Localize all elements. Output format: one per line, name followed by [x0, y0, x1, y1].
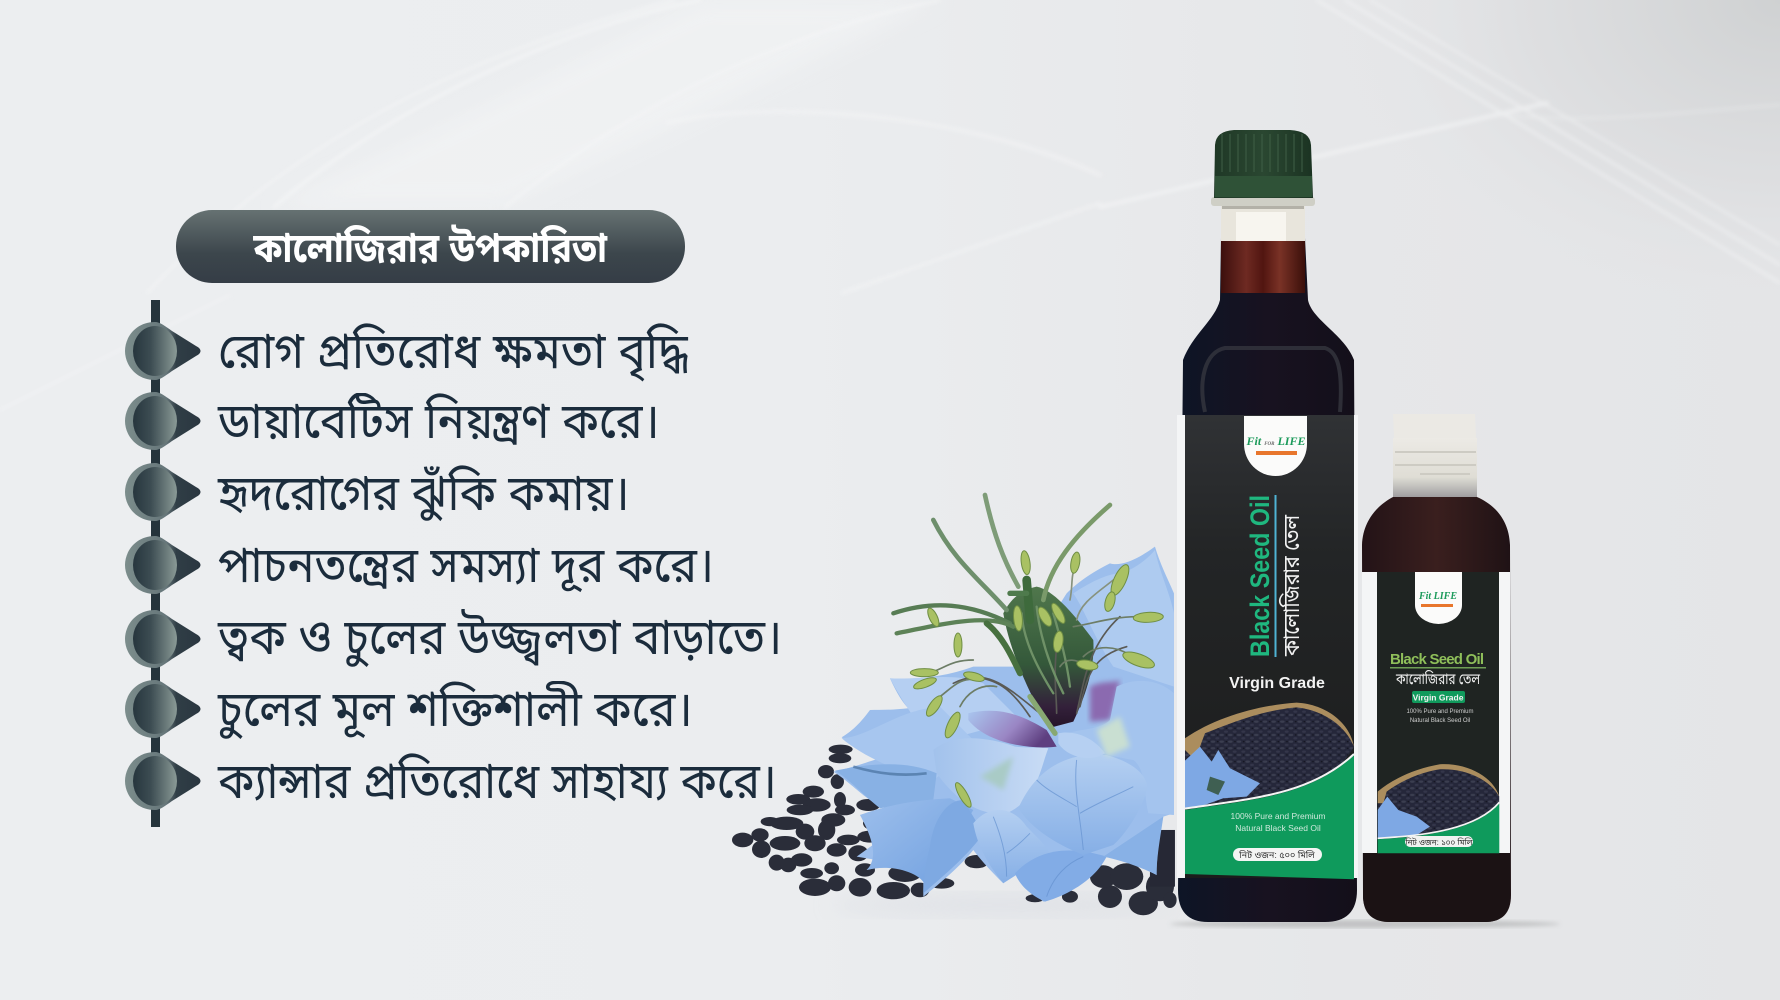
label claim: Natural Black Seed Oil — [1410, 718, 1470, 724]
benefit 1: রোগ প্রতিরোধ ক্ষমতা বৃদ্ধি — [218, 323, 688, 379]
bullet 5 — [125, 610, 200, 668]
benefit 3: হৃদরোগের ঝুঁকি কমায়। — [218, 465, 630, 521]
label — [1177, 415, 1358, 879]
green swoosh — [1185, 754, 1354, 879]
bottle cap — [1214, 130, 1313, 198]
weight pill: নিট ওজন: ৫০০ মিলি — [1238, 849, 1315, 860]
benefit 6: চুলের মূল শক্তিশালী করে। — [218, 681, 693, 737]
bullet 7 — [125, 752, 200, 810]
benefit 7: ক্যান্সার প্রতিরোধে সাহায্য করে। — [218, 753, 777, 809]
vertical title: কালোজিরার তেল — [1279, 514, 1304, 657]
bullet 4 — [125, 536, 200, 594]
grade text: Virgin Grade — [1229, 675, 1325, 692]
flower — [833, 495, 1174, 902]
label claim — [1406, 709, 1474, 724]
weight pill: নিট ওজন: ১০০ মিলি — [1404, 838, 1473, 847]
product name: Black Seed Oil — [1390, 651, 1484, 668]
anthers — [910, 550, 1164, 809]
benefit 2: ডায়াবেটিস নিয়ন্ত্রণ করে। — [218, 393, 660, 449]
bottle body — [1178, 238, 1357, 922]
large bottle — [1177, 130, 1358, 922]
small bottle — [1362, 414, 1511, 922]
label — [1362, 572, 1510, 853]
label claim: 100% Pure and Premium — [1406, 709, 1474, 715]
bullet 3 — [125, 463, 200, 521]
logo badge — [1415, 572, 1462, 624]
weight pill — [1233, 848, 1322, 861]
bottle body — [1362, 497, 1511, 922]
bullet 6 — [125, 680, 200, 738]
label claim: 100% Pure and Premium — [1231, 811, 1325, 821]
bullet 1 — [125, 322, 200, 380]
bengali name: কালোজিরার তেল — [1395, 671, 1481, 688]
vertical title: Black Seed Oil — [1245, 495, 1275, 657]
logo badge: Fit LIFE — [1418, 591, 1457, 602]
green swoosh — [1378, 802, 1499, 853]
translucent cap — [1393, 414, 1477, 498]
vertical title — [1245, 495, 1304, 657]
logo badge: Fit FOR LIFE — [1246, 434, 1305, 448]
seed bowl — [1378, 764, 1499, 839]
label claim — [1231, 811, 1325, 833]
grade badge: Virgin Grade — [1413, 692, 1464, 702]
title pill — [176, 210, 685, 283]
stamens — [893, 495, 1137, 733]
title pill: কালোজিরার উপকারিতা — [254, 225, 607, 271]
seeds pile — [732, 745, 1177, 915]
logo badge — [1244, 416, 1307, 476]
label claim: Natural Black Seed Oil — [1235, 823, 1321, 833]
bullet 2 — [125, 392, 200, 450]
petals — [833, 547, 1174, 902]
benefit 5: ত্বক ও চুলের উজ্জ্বলতা বাড়াতে। — [218, 609, 782, 665]
product illustration — [732, 130, 1511, 922]
seed bowl — [1185, 703, 1354, 808]
benefit 4: পাচনতন্ত্রের সমস্যা দূর করে। — [218, 537, 714, 593]
